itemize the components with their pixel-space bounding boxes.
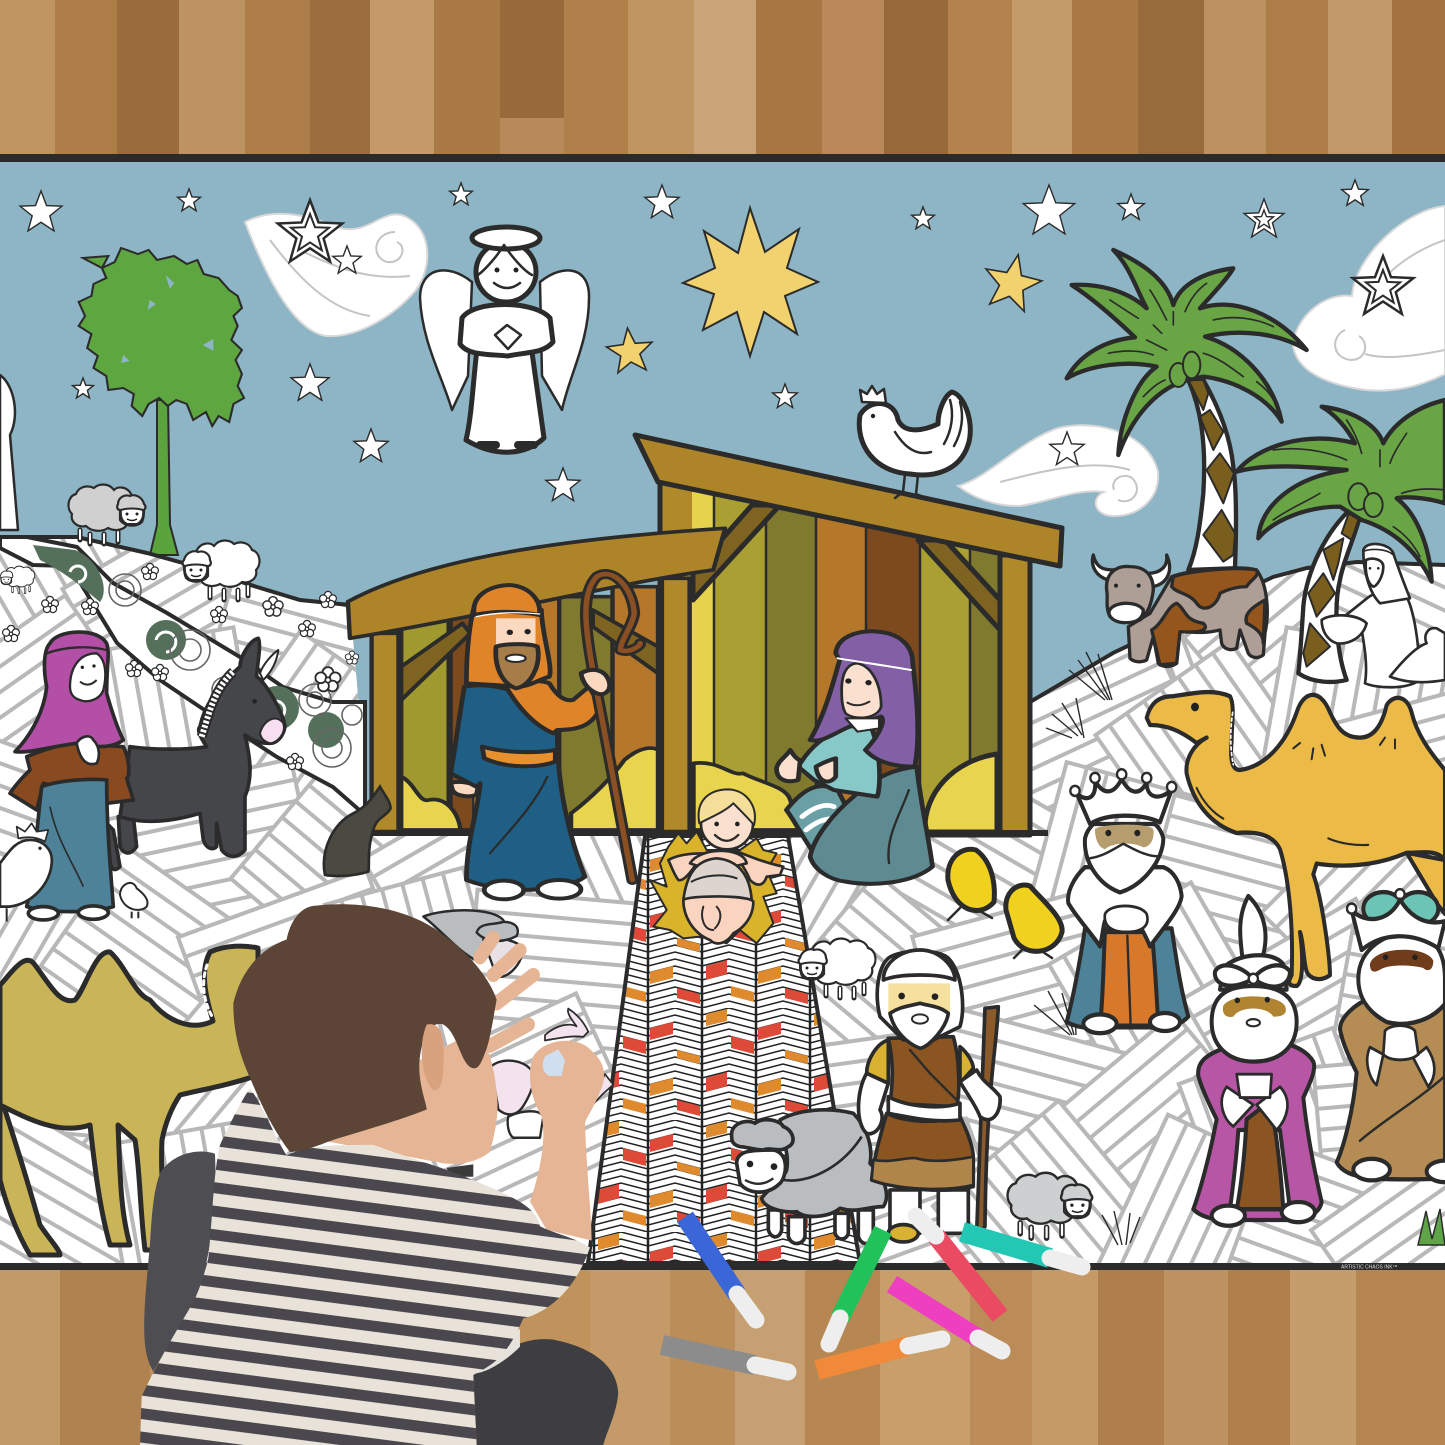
cow [1092, 555, 1267, 666]
tree [79, 248, 244, 555]
markers [662, 1216, 1082, 1372]
marker: pink [892, 1284, 1002, 1351]
shooting star cloud top left [245, 200, 427, 336]
marker in hand [543, 1049, 565, 1076]
dark gap below chin [447, 1164, 473, 1177]
hair [233, 904, 497, 1152]
mary [776, 631, 932, 884]
olive camel [0, 946, 258, 1255]
striped shirt [140, 1088, 590, 1445]
white shirt hem [477, 1329, 520, 1373]
king with feather [1193, 896, 1322, 1226]
left rooster and chick [0, 823, 148, 922]
wood floor top [0, 0, 1445, 158]
sheep and rabbits beside boy [423, 910, 613, 1138]
marker: green [829, 1230, 883, 1344]
wood floor bottom [0, 1265, 1445, 1445]
front stable [348, 528, 798, 832]
marker: orange [817, 1339, 942, 1370]
donkey [107, 638, 285, 869]
ear [422, 1024, 444, 1090]
stable base line [370, 830, 1048, 836]
figure at left edge [0, 375, 18, 530]
shepherd [859, 950, 1000, 1242]
ground with hatching [0, 539, 1445, 1263]
boy [140, 904, 618, 1445]
knee [144, 1152, 217, 1371]
marker: red [916, 1216, 1000, 1316]
flowers [3, 563, 359, 770]
joseph [451, 574, 640, 899]
king with turquoise hat [1337, 889, 1445, 1182]
top border [0, 154, 1445, 162]
woman with bowl and goose [1322, 544, 1445, 687]
shooting star cloud top right [1293, 206, 1445, 391]
back stable [635, 435, 1062, 835]
marker: gray [662, 1345, 788, 1372]
shepherd staff [586, 574, 640, 880]
yellow camel [1147, 692, 1445, 986]
baby jesus in hay [650, 789, 783, 943]
marker: blue [685, 1217, 756, 1320]
small yellow stars [605, 249, 1046, 374]
bottom border [0, 1263, 1445, 1270]
copyright: ARTISTIC CHAOS INK™ [1341, 1264, 1398, 1270]
swirl hill band [0, 537, 365, 815]
right palm tree [1237, 400, 1445, 682]
black cat [324, 787, 391, 876]
marker: teal [962, 1232, 1082, 1267]
woman with purple scarf (left) [10, 632, 133, 920]
other hand fingers [480, 938, 533, 1046]
angel [420, 227, 589, 452]
sheep on hills [0, 484, 259, 600]
small sheep bottom right [1008, 1173, 1092, 1238]
shooting star cloud middle right [958, 425, 1158, 516]
big yellow star [683, 208, 818, 356]
face and neck [327, 1032, 498, 1164]
lower leg [473, 1339, 618, 1445]
big sheep [732, 1110, 887, 1244]
left palm tree [1067, 250, 1307, 570]
ground skyline [0, 537, 1445, 702]
herringbone blanket [588, 836, 860, 1263]
chicks [948, 849, 1062, 958]
white stars [20, 180, 1368, 501]
rooster on roof [859, 386, 970, 498]
king with crown [1067, 769, 1188, 1033]
grass tufts [1034, 652, 1445, 1245]
small sheep centre [798, 938, 875, 998]
arm and hand [530, 1041, 604, 1240]
sky [0, 154, 1445, 1270]
